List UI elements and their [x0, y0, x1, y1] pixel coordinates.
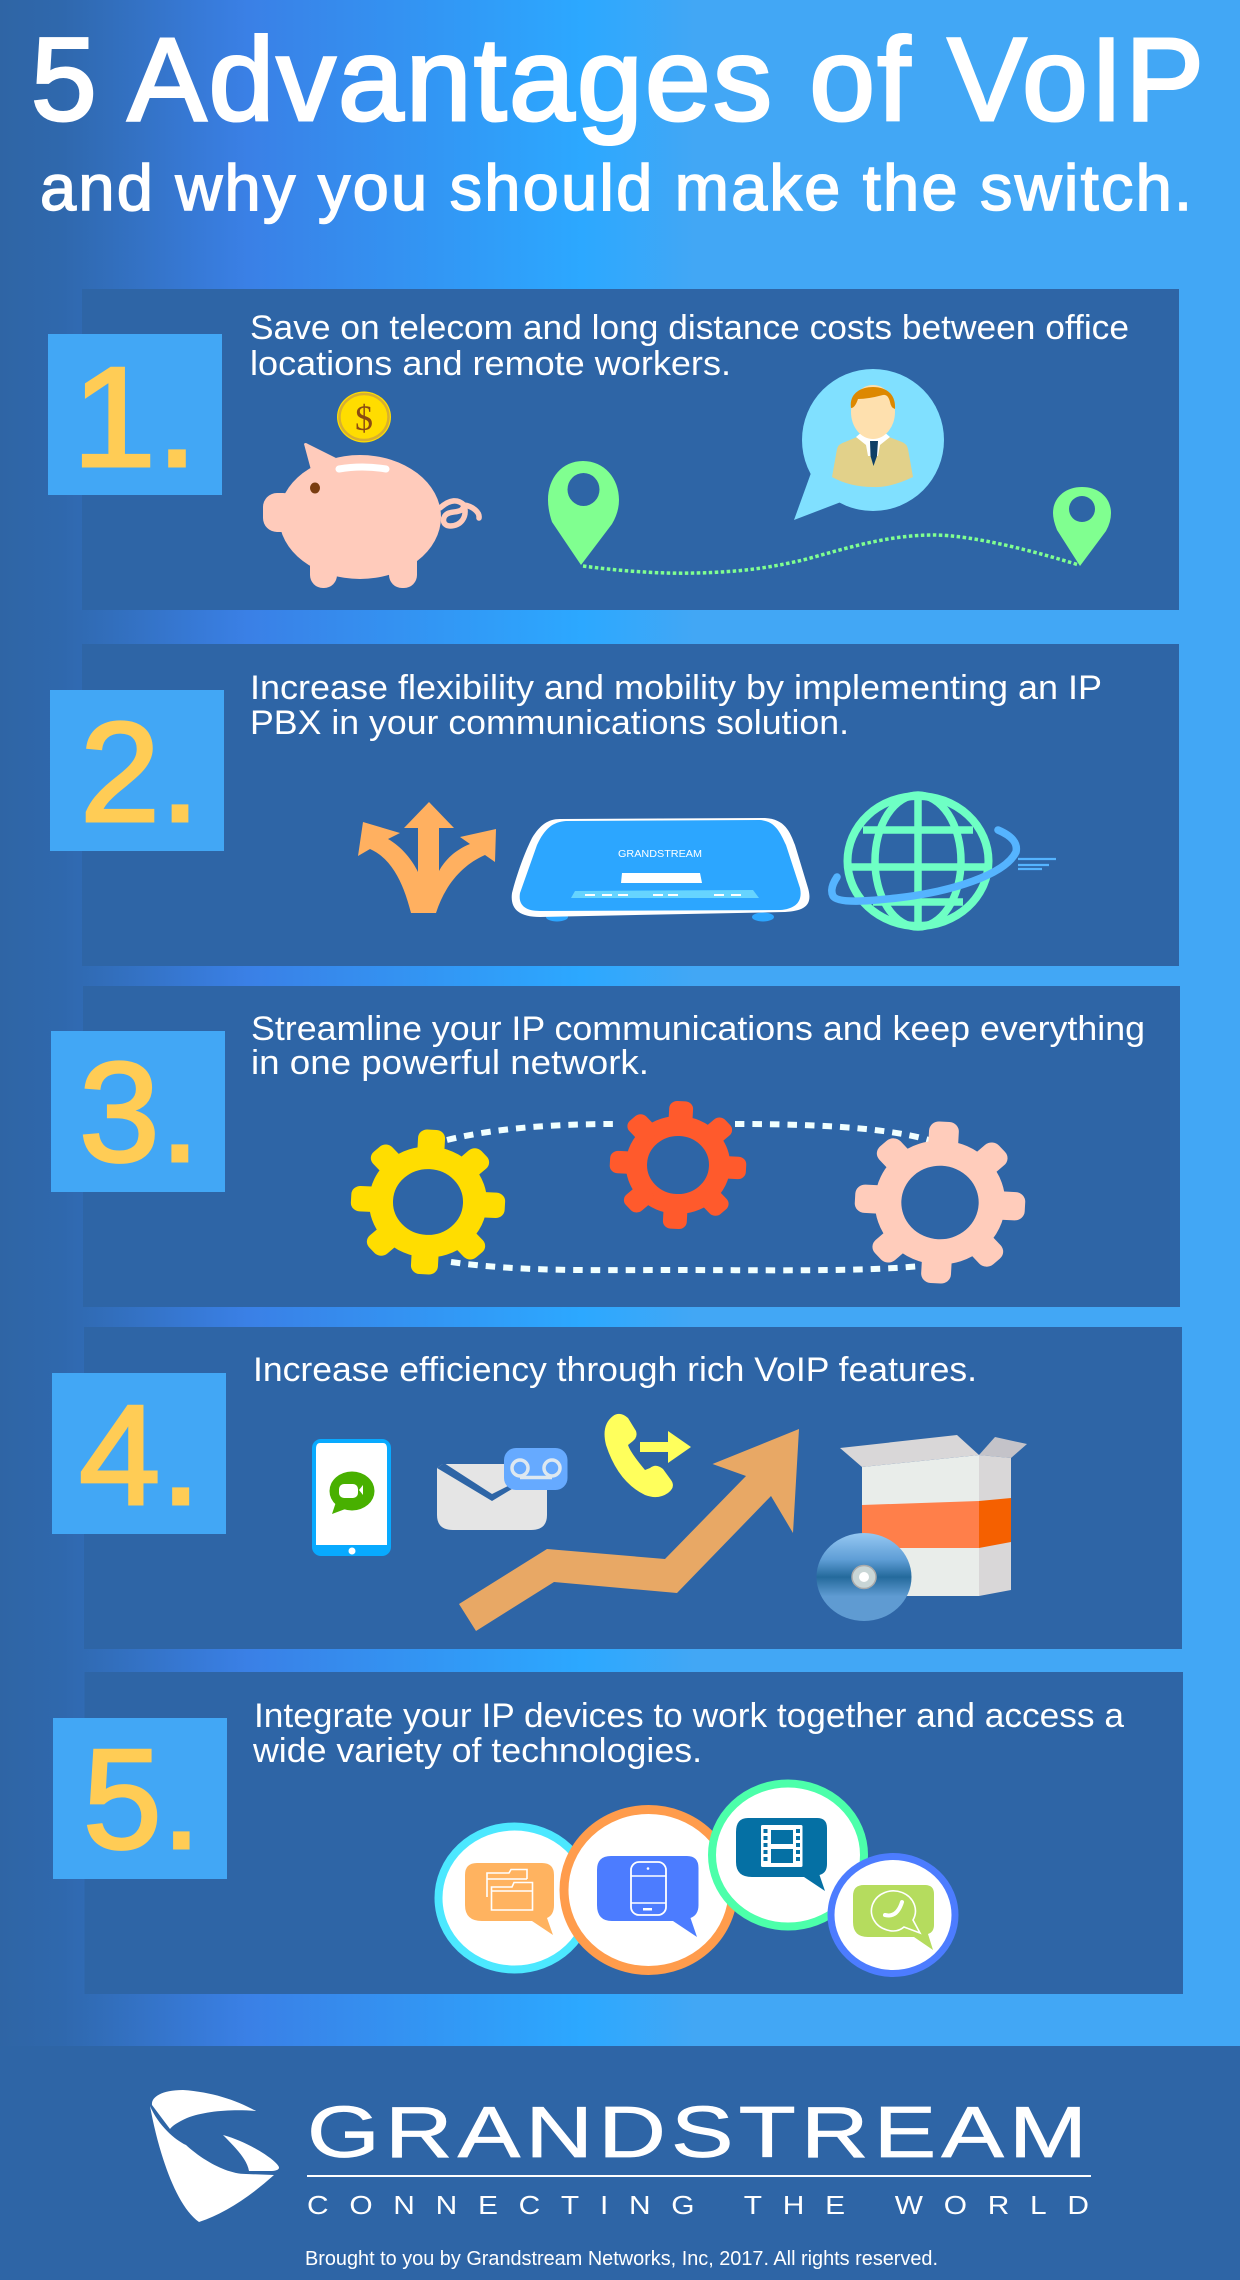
number badge 2 [50, 690, 224, 852]
subheading: and why you should make the switch. [40, 151, 1192, 224]
logo wordmark: GRANDSTREAM [307, 2091, 1087, 2173]
number badge 3: 3. [79, 1033, 200, 1192]
number badge 1: 1. [72, 338, 198, 497]
icon: red gear [606, 1098, 750, 1232]
copyright line: Brought to you by Grandstream Networks, Inc, 2017. All rights reserved. [305, 2248, 938, 2270]
title [31, 14, 1204, 224]
number badge 2: 2. [80, 693, 200, 852]
dotted network line [447, 1124, 929, 1270]
icon: folders bubble [438, 1826, 590, 1970]
icon: film bubble [712, 1784, 864, 1926]
number badge 4 [52, 1373, 226, 1535]
icon: call forwarding handset [605, 1414, 691, 1497]
icon: voicemail envelope [437, 1448, 568, 1530]
text: advantage 1: locations and remote workers. [250, 345, 731, 383]
panel 1: telecom costs [48, 289, 1179, 610]
icon: piggy bank [263, 443, 479, 588]
number badge 3 [51, 1031, 225, 1192]
text: advantage 2: PBX in your communications solution. [250, 704, 849, 742]
text: advantage 5: wide variety of technologies. [252, 1732, 702, 1770]
text: advantage 2 [250, 669, 1102, 742]
icon: globe with orbit [832, 795, 1056, 927]
icon: phone chat bubble [831, 1856, 955, 1974]
panel 3: streamline communications [51, 986, 1180, 1307]
text: advantage 3: in one powerful network. [251, 1044, 649, 1082]
logo tagline: CONNECTING THE WORLD [307, 2191, 1089, 2220]
icon: gold coin: $ [355, 398, 373, 438]
number badge 4: 4. [79, 1376, 201, 1535]
icon: remote worker speech bubble [794, 369, 944, 520]
text: advantage 4: Increase efficiency through rich VoIP features. [253, 1351, 977, 1389]
text: advantage 5 [252, 1697, 1124, 1770]
text: advantage 5: Integrate your IP devices to work together and access a [254, 1697, 1124, 1735]
icon: software box with disc [816, 1435, 1027, 1621]
dotted route line [583, 535, 1079, 573]
panel 4: rich VoIP features [52, 1327, 1182, 1649]
text: advantage 3: Streamline your IP communications and keep everything [251, 1010, 1145, 1048]
arrow: rising growth [459, 1429, 799, 1631]
icon: three-way arrows [358, 802, 496, 913]
icon: peach gear [851, 1118, 1029, 1287]
text: advantage 1: Save on telecom and long distance costs between office [250, 309, 1129, 347]
logo emblem [150, 2090, 279, 2222]
panel 2: flexibility and mobility [50, 644, 1179, 966]
icon: location pin right [1053, 487, 1111, 566]
icon: yellow gear [347, 1126, 509, 1278]
text: advantage 2: Increase flexibility and mobility by implementing an IP [250, 669, 1102, 707]
icon: smartphone bubble [564, 1810, 733, 1970]
icon: location pin left [548, 461, 619, 565]
text: advantage 3 [251, 1010, 1145, 1082]
icon: gold coin [337, 392, 391, 442]
number badge 5 [53, 1718, 227, 1879]
text: advantage 1 [250, 309, 1129, 383]
panel 5: integrate IP devices [53, 1672, 1183, 1994]
footer band [0, 2046, 1240, 2280]
number badge 1 [48, 334, 222, 497]
number badge 5: 5. [83, 1720, 201, 1879]
icon: smartphone video chat [312, 1439, 391, 1556]
icon: IP PBX device: GRANDSTREAM [618, 849, 702, 860]
main heading: 5 Advantages of VoIP [31, 14, 1204, 146]
icon: IP PBX device [512, 818, 809, 922]
